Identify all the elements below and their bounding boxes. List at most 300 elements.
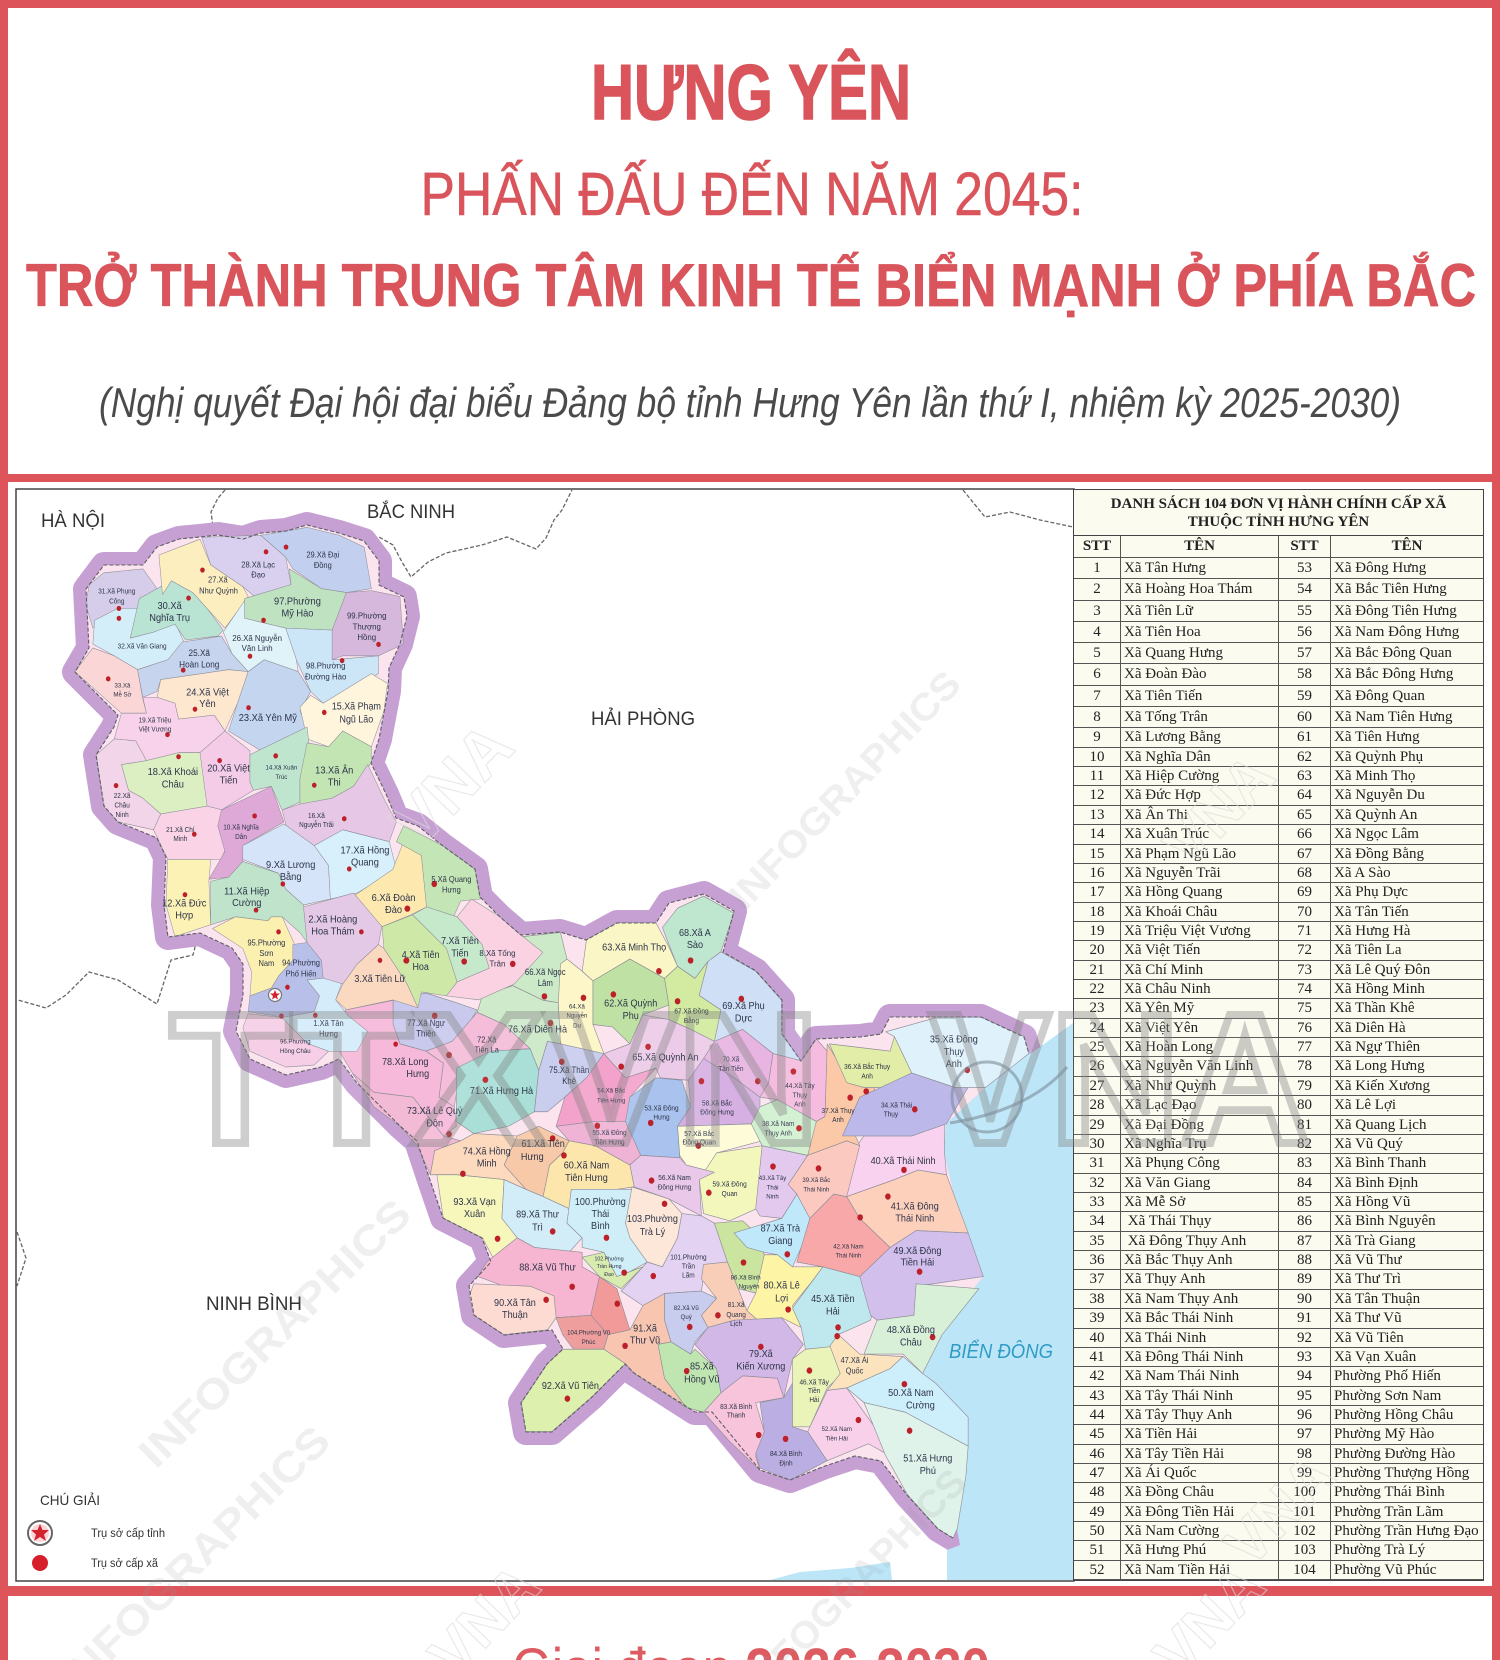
commune labels south: 86.Xã Bình (731, 1274, 761, 1282)
commune labels south: Du (573, 1022, 581, 1030)
table grid: Xã Tây Thụy Anh (1124, 1407, 1232, 1423)
commune labels north: Nguyễn Trãi (299, 820, 334, 829)
commune labels north: Dân (235, 834, 247, 841)
commune labels south: Thụy (793, 1092, 808, 1100)
commune labels south: Anh (832, 1117, 844, 1124)
table grid: Xã Tiên Lữ (1124, 603, 1193, 619)
table grid: Phường Mỹ Hào (1334, 1426, 1434, 1442)
table grid: Xã Nam Cường (1124, 1523, 1219, 1539)
commune labels north: 13.Xã Ân (315, 765, 353, 776)
table grid: Xã A Sào (1334, 865, 1391, 881)
commune labels north: Đồng (314, 561, 332, 570)
table grid: 37 (1090, 1271, 1104, 1287)
table grid: 47 (1090, 1465, 1104, 1481)
commune labels south: Thiên (416, 1029, 436, 1039)
commune labels south: 42.Xã Nam (833, 1243, 864, 1251)
table grid: 64 (1297, 787, 1312, 803)
table grid: Xã Bắc Thụy Anh (1124, 1252, 1232, 1268)
commune dots north (106, 545, 515, 1082)
commune labels south: 50.Xã Nam (888, 1387, 934, 1399)
commune labels south: 41.Xã Đông (891, 1201, 939, 1213)
commune labels south: 66.Xã Ngọc (525, 968, 566, 977)
commune labels south: Kiến Xương (736, 1361, 785, 1373)
commune labels south: 43.Xã Tây (759, 1175, 787, 1182)
table grid: Phường Hồng Châu (1334, 1407, 1453, 1423)
commune labels south: Tiền Hải (901, 1257, 934, 1269)
neighbour province labels: HÀ NỘI (41, 510, 105, 532)
commune labels south: 77.Xã Ngự (407, 1019, 445, 1028)
table grid: 94 (1297, 1368, 1312, 1384)
table grid: 96 (1297, 1407, 1312, 1423)
table grid: Xã Bắc Tiên Hưng (1334, 581, 1447, 597)
table grid: 48 (1090, 1484, 1104, 1500)
commune labels south: 89.Xã Thư (516, 1209, 559, 1221)
table grid: 95 (1297, 1388, 1312, 1404)
table grid: 38 (1090, 1291, 1104, 1307)
table grid: 56 (1297, 624, 1312, 640)
commune labels south: Nguyên (739, 1283, 760, 1291)
table grid: Xã Đại Đồng (1124, 1117, 1204, 1133)
commune labels south: Dực (735, 1013, 752, 1025)
table grid: Xã Quỳnh Phụ (1334, 749, 1423, 765)
table grid: Xã Nam Tiên Hưng (1334, 709, 1453, 725)
commune labels north: 6.Xã Đoàn (372, 893, 415, 904)
table grid: 60 (1297, 709, 1312, 725)
table grid: Xã Châu Ninh (1124, 981, 1211, 997)
table grid: Xã Tân Tiến (1334, 904, 1409, 920)
commune labels south: 49.Xã Đông (893, 1246, 941, 1257)
table grid (1074, 536, 1483, 1580)
table grid: 24 (1090, 1020, 1104, 1036)
commune labels south: 57.Xã Bắc (684, 1129, 715, 1138)
table grid: Xã Phạm Ngũ Lão (1124, 846, 1236, 862)
neighbour province labels: BẮC NINH (367, 501, 455, 523)
commune labels north: 22.Xã (114, 793, 131, 800)
commune labels south: 72.Xã (477, 1035, 497, 1045)
commune labels south: Bằng (684, 1016, 699, 1025)
table grid: Xã Tân Thuận (1334, 1291, 1420, 1307)
table grid: Xã Vũ Quý (1334, 1136, 1403, 1152)
commune labels north: Hưng (319, 1029, 338, 1039)
table grid: Xã Thái Thụy (1128, 1213, 1211, 1229)
table grid: 2 (1093, 581, 1101, 597)
table grid: 89 (1297, 1271, 1312, 1287)
table grid: Xã Trà Giang (1334, 1233, 1416, 1249)
table grid: 102 (1293, 1523, 1316, 1539)
table grid: 100 (1293, 1484, 1316, 1500)
table grid: 88 (1297, 1252, 1312, 1268)
commune labels south: Thư Vũ (630, 1335, 660, 1347)
commune labels north: Nghĩa Trụ (149, 613, 190, 624)
commune labels south: Nguyễn (567, 1010, 588, 1020)
commune labels south: Trà Lý (640, 1226, 665, 1238)
commune labels north: 95.Phường (247, 938, 285, 948)
commune labels north: 33.Xã (115, 682, 131, 690)
table grid: 36 (1090, 1252, 1104, 1268)
table grid: Xã Đức Hợp (1124, 787, 1201, 803)
commune labels south: Anh (794, 1101, 806, 1109)
commune labels south: Phụ (623, 1011, 639, 1022)
table grid: Xã Lê Lợi (1334, 1097, 1396, 1113)
table grid: 61 (1297, 729, 1312, 745)
table grid: Xã Lương Bằng (1124, 729, 1221, 745)
commune labels south: 87.Xã Trà (761, 1223, 801, 1235)
table grid: 72 (1297, 942, 1312, 958)
table grid: 23 (1090, 1000, 1104, 1016)
subtitle line: PHẤN ĐẤU ĐẾN NĂM 2045: (420, 160, 1084, 228)
table grid: Xã Diên Hà (1334, 1020, 1406, 1036)
legend (28, 1492, 165, 1571)
table grid: Xã Bình Nguyên (1334, 1213, 1436, 1229)
commune labels south: Đông Hưng (700, 1109, 734, 1117)
table grid: Xã Đông Tiền Hải (1124, 1504, 1234, 1520)
commune labels south: Lâm (538, 979, 553, 988)
commune labels south: Hải (826, 1306, 840, 1318)
table grid: Xã Quang Hưng (1124, 645, 1223, 661)
commune labels south: 85.Xã (690, 1361, 714, 1373)
neighbour province labels (41, 501, 695, 1315)
table grid: 50 (1090, 1523, 1104, 1539)
commune labels south: 100.Phường (575, 1196, 626, 1208)
table grid: Xã Phụng Công (1124, 1155, 1220, 1171)
table grid: Xã Việt Tiến (1124, 942, 1200, 958)
commune labels south: Định (779, 1460, 793, 1468)
commune labels south: Ninh (766, 1193, 779, 1201)
table grid: 79 (1297, 1078, 1312, 1094)
table grid: 87 (1297, 1233, 1312, 1249)
table grid: Phường Sơn Nam (1334, 1388, 1441, 1404)
commune labels south: 64.Xã (569, 1003, 585, 1011)
table grid: Xã Mễ Sở (1124, 1194, 1185, 1210)
icon: provincial seat star on map (268, 988, 282, 1002)
table grid: 85 (1297, 1194, 1312, 1210)
table grid: 84 (1297, 1175, 1312, 1191)
commune labels south: 61.Xã Tiên (521, 1139, 565, 1150)
table grid: Xã Lạc Đạo (1124, 1097, 1196, 1113)
commune labels north: 98.Phường (306, 661, 346, 671)
table grid: Xã Nam Thụy Anh (1124, 1291, 1238, 1307)
legend text: commune seat: Trụ sở cấp xã (91, 1558, 159, 1570)
commune labels south: Trần Hưng (597, 1264, 621, 1270)
commune labels south: Châu (900, 1337, 922, 1349)
map panel frame (16, 489, 1074, 1581)
table grid: 99 (1297, 1465, 1312, 1481)
table grid: 68 (1297, 865, 1312, 881)
table grid: Xã Hoàng Hoa Thám (1124, 581, 1252, 597)
commune labels north: Công (109, 598, 125, 606)
commune labels north: Mỹ Hào (281, 608, 314, 619)
commune labels south: 83.Xã Bình (720, 1404, 752, 1411)
commune labels north: 19.Xã Triệu (139, 717, 172, 724)
neighbour province labels: HẢI PHÒNG (591, 708, 695, 730)
commune labels south: 34.Xã Thái (881, 1102, 913, 1109)
large TTXVN/VNA watermark: VNA (930, 976, 1310, 1183)
commune labels south: Anh (946, 1059, 962, 1070)
table grid: Xã Việt Yên (1124, 1020, 1198, 1036)
commune labels south: 82.Xã Vũ (674, 1305, 699, 1312)
commune labels south: Lợi (775, 1293, 788, 1305)
commune labels north: 8.Xã Tống (479, 949, 516, 958)
table grid: Xã Ái Quốc (1124, 1465, 1196, 1481)
province dashed boundary (75, 525, 1029, 1538)
table grid: Xã Thư Trì (1334, 1271, 1401, 1287)
diagonal watermarks: VNA (377, 708, 527, 860)
commune labels south: 74.Xã Hồng (463, 1146, 511, 1158)
commune labels south: 35.Xã Đông (930, 1034, 978, 1046)
commune labels north: Yên (199, 699, 216, 710)
commune labels north: 99.Phường (347, 611, 387, 621)
sea label: BIỂN ĐÔNG (949, 1340, 1053, 1363)
commune labels north: Châu (162, 779, 184, 791)
commune labels north: 25.Xã (189, 648, 210, 658)
commune labels north: Cường (232, 898, 261, 909)
table grid: 31 (1090, 1155, 1104, 1171)
table grid: 69 (1297, 884, 1312, 900)
table grid: Xã Nguyễn Trãi (1124, 865, 1221, 881)
table grid: 80 (1297, 1097, 1312, 1113)
table grid: Phường Trà Lý (1334, 1542, 1425, 1558)
commune labels south: 52.Xã Nam (822, 1426, 852, 1433)
commune labels south: Thái Ninh (895, 1213, 934, 1225)
table grid: Xã Tiên Hoa (1124, 624, 1201, 640)
table grid: 73 (1297, 962, 1312, 978)
commune labels north: Sơn (259, 949, 273, 958)
commune labels south: 53.Xã Đông (644, 1105, 679, 1112)
commune labels north: 97.Phường (274, 596, 321, 608)
table grid: 52 (1090, 1562, 1104, 1578)
commune labels north: 1.Xã Tân (313, 1019, 344, 1028)
commune labels south: Tiên Hưng (594, 1139, 625, 1147)
commune labels north: 26.Xã Nguyễn (232, 632, 282, 643)
table grid: 15 (1090, 846, 1104, 862)
icon: commune seat (32, 1555, 48, 1571)
diagonal watermarks: INFOGRAPHICS (129, 1190, 420, 1476)
table grid: 83 (1297, 1155, 1312, 1171)
commune labels south: 90.Xã Tân (494, 1298, 536, 1309)
table grid: Xã Yên Mỹ (1124, 1000, 1194, 1016)
commune labels south: Hưng (521, 1152, 544, 1163)
commune labels south: Thụy Anh (764, 1130, 792, 1138)
table grid: Xã Ân Thi (1124, 807, 1188, 823)
commune labels south: 39.Xã Bắc (802, 1175, 831, 1184)
commune labels south: Quan (722, 1191, 738, 1198)
commune labels north: Trân (490, 959, 506, 969)
table grid: 42 (1090, 1368, 1104, 1384)
table grid: 54 (1297, 581, 1312, 597)
table grid: 74 (1297, 981, 1312, 997)
commune labels south: 54.Xã Bắc (597, 1085, 626, 1094)
table grid: Xã Ngọc Lâm (1334, 826, 1419, 842)
commune labels south: 88.Xã Vũ Thư (519, 1262, 576, 1274)
commune labels south: 37.Xã Thụy (822, 1108, 855, 1115)
table grid: 14 (1090, 826, 1104, 842)
commune labels south: Đông Hưng (658, 1184, 691, 1191)
table grid: 44 (1090, 1407, 1104, 1423)
commune labels south: 71.Xã Hưng Hà (470, 1085, 534, 1097)
commune list table (1073, 489, 1484, 1581)
commune labels south: Trần (682, 1261, 695, 1270)
table grid: 33 (1090, 1194, 1104, 1210)
table grid: 21 (1090, 962, 1104, 978)
table grid: Xã Bắc Đông Quan (1334, 645, 1452, 661)
commune labels south: 78.Xã Long (382, 1057, 428, 1068)
commune labels north: Hoa Thám (311, 926, 354, 938)
table grid: Xã Bắc Thái Ninh (1124, 1310, 1233, 1326)
commune labels south: Đôn (426, 1118, 443, 1130)
table grid: 103 (1293, 1542, 1316, 1558)
table grid: Xã Bắc Đông Hưng (1334, 666, 1453, 682)
commune labels south: 92.Xã Vũ Tiên (542, 1381, 599, 1392)
communes north and west (75, 527, 543, 1067)
table grid: 25 (1090, 1039, 1104, 1055)
large TTXVN/VNA watermark (170, 976, 1310, 1183)
table grid: 62 (1297, 749, 1312, 765)
commune labels south: 65.Xã Quỳnh An (632, 1052, 699, 1064)
table grid: STT (1083, 538, 1111, 554)
table grid: Xã Bình Định (1334, 1175, 1418, 1191)
table grid: 75 (1297, 1000, 1312, 1016)
commune labels north: Hồng Châu (280, 1046, 311, 1055)
commune labels south: Xuân (464, 1208, 485, 1220)
commune labels north: 30.Xã (158, 600, 182, 612)
table grid: Xã Văn Giang (1124, 1175, 1210, 1191)
table grid: 58 (1297, 666, 1312, 682)
table grid: Xã Tiền Hải (1124, 1426, 1197, 1442)
table grid: Phường Trần Hưng Đạo (1334, 1523, 1479, 1539)
table grid: Xã Tây Thái Ninh (1124, 1388, 1233, 1404)
commune dots south (404, 881, 970, 1442)
commune labels north (98, 550, 516, 1055)
table grid: Phường Vũ Phúc (1334, 1562, 1436, 1578)
table title (1074, 490, 1483, 536)
commune labels south: 91.Xã (633, 1323, 658, 1334)
table grid: 71 (1297, 923, 1312, 939)
commune labels north: 29.Xã Đại (306, 550, 339, 559)
commune labels south: Tiên La (475, 1045, 499, 1055)
table grid: 13 (1090, 807, 1104, 823)
table grid: Xã Quang Lịch (1334, 1117, 1426, 1133)
commune labels south: 62.Xã Quỳnh (604, 998, 657, 1010)
table grid: 78 (1297, 1058, 1312, 1074)
commune labels south: Thanh (727, 1412, 745, 1420)
commune labels south: 44.Xã Tây (785, 1083, 815, 1090)
commune labels south: Trì (532, 1222, 543, 1234)
table grid: Xã Vạn Xuân (1334, 1349, 1416, 1365)
table grid: Xã Thần Khê (1334, 1000, 1415, 1016)
table grid: Xã Tiên Tiến (1124, 688, 1202, 704)
table grid: Xã Chí Minh (1124, 962, 1203, 978)
commune labels north: Hoàn Long (179, 659, 220, 669)
table grid: 55 (1297, 603, 1312, 619)
table grid: 59 (1297, 688, 1312, 704)
title: HƯNG YÊN (591, 48, 911, 136)
table grid: 90 (1297, 1291, 1312, 1307)
table grid: Xã Nghĩa Dân (1124, 749, 1211, 765)
table grid: Xã Nghĩa Trụ (1124, 1136, 1207, 1152)
commune labels south: 46.Xã Tây (799, 1379, 829, 1387)
table grid: Xã Thư Vũ (1334, 1310, 1402, 1326)
commune labels south: Thụy (944, 1047, 964, 1058)
table grid: Xã Triệu Việt Vương (1124, 923, 1251, 939)
commune labels south: Cường (906, 1400, 935, 1412)
table grid: 53 (1297, 560, 1312, 576)
table grid: Xã Đông Quan (1334, 688, 1425, 704)
table grid: Xã Hưng Phú (1124, 1542, 1206, 1558)
table grid: Xã Vũ Thư (1334, 1252, 1402, 1268)
sea patch at bottom (770, 1562, 892, 1580)
commune labels south: Hải (809, 1397, 819, 1404)
table grid: Xã Đồng Châu (1124, 1484, 1214, 1500)
commune labels south: 40.Xã Thái Ninh (871, 1156, 936, 1167)
table grid: 35 (1090, 1233, 1104, 1249)
commune labels south: 70.Xã (722, 1056, 740, 1063)
commune labels north: Văn Linh (242, 644, 273, 653)
table grid: 4 (1093, 624, 1101, 640)
commune labels north: Trúc (275, 774, 288, 781)
commune labels south: 101.Phường (670, 1254, 707, 1262)
table grid: 101 (1293, 1504, 1316, 1520)
commune labels north: 11.Xã Hiệp (224, 886, 270, 897)
commune labels south: Đạo (604, 1272, 614, 1278)
commune labels north: 12.Xã Đức (162, 898, 207, 910)
commune labels south: Phúc (582, 1339, 596, 1346)
commune labels south (382, 927, 978, 1477)
table grid: 9 (1093, 729, 1101, 745)
table grid: Xã Lê Quý Đôn (1334, 962, 1430, 978)
table grid: Xã Hồng Minh (1334, 981, 1425, 997)
commune labels south: 38.Xã Nam (762, 1121, 795, 1128)
table grid: 6 (1093, 666, 1101, 682)
commune labels north: Phố Hiến (286, 969, 316, 979)
commune labels south: Anh (861, 1073, 873, 1080)
table grid: 19 (1090, 923, 1104, 939)
commune labels north: Hoa (412, 960, 430, 972)
table grid: Phường Phố Hiến (1334, 1368, 1441, 1384)
table grid: 1 (1093, 560, 1101, 576)
table grid: 66 (1297, 826, 1312, 842)
table grid: Xã Tiên Hưng (1334, 729, 1420, 745)
diagonal watermarks: VNA (1151, 741, 1287, 879)
commune labels south: 73.Xã Lê Quý (407, 1106, 463, 1117)
commune labels north: Như Quỳnh (199, 586, 238, 595)
commune labels south: 67.Xã Đồng (674, 1006, 709, 1015)
commune labels north: 14.Xã Xuân (266, 764, 298, 772)
commune labels south: 45.Xã Tiền (811, 1294, 855, 1305)
table grid: 46 (1090, 1446, 1104, 1462)
commune labels north: 24.Xã Việt (186, 687, 229, 699)
table grid: 26 (1090, 1058, 1104, 1074)
table grid: Xã Long Hưng (1334, 1058, 1425, 1074)
table grid: Xã Minh Thọ (1334, 768, 1415, 784)
commune labels north: 17.Xã Hồng (340, 845, 389, 857)
commune labels south: Tân Tiến (718, 1064, 744, 1073)
table grid: 32 (1090, 1175, 1104, 1191)
table grid: Xã Quỳnh An (1334, 807, 1417, 823)
commune labels south: 93.Xã Vạn (453, 1196, 496, 1208)
commune labels north: Hợp (175, 910, 194, 922)
commune labels north: 2.Xã Hoàng (308, 914, 357, 925)
table grid: 98 (1297, 1446, 1312, 1462)
commune labels north: Đạo (251, 570, 266, 580)
table grid: 34 (1090, 1213, 1104, 1229)
commune labels north: 16.Xã (308, 813, 325, 820)
table grid: Xã Như Quỳnh (1124, 1078, 1216, 1094)
table grid: 57 (1297, 645, 1312, 661)
table grid: 7 (1093, 688, 1101, 704)
commune labels north: 27.Xã (208, 575, 228, 584)
table grid: Xã Đông Tiên Hưng (1334, 603, 1457, 619)
commune labels north: 94.Phường (282, 958, 320, 968)
